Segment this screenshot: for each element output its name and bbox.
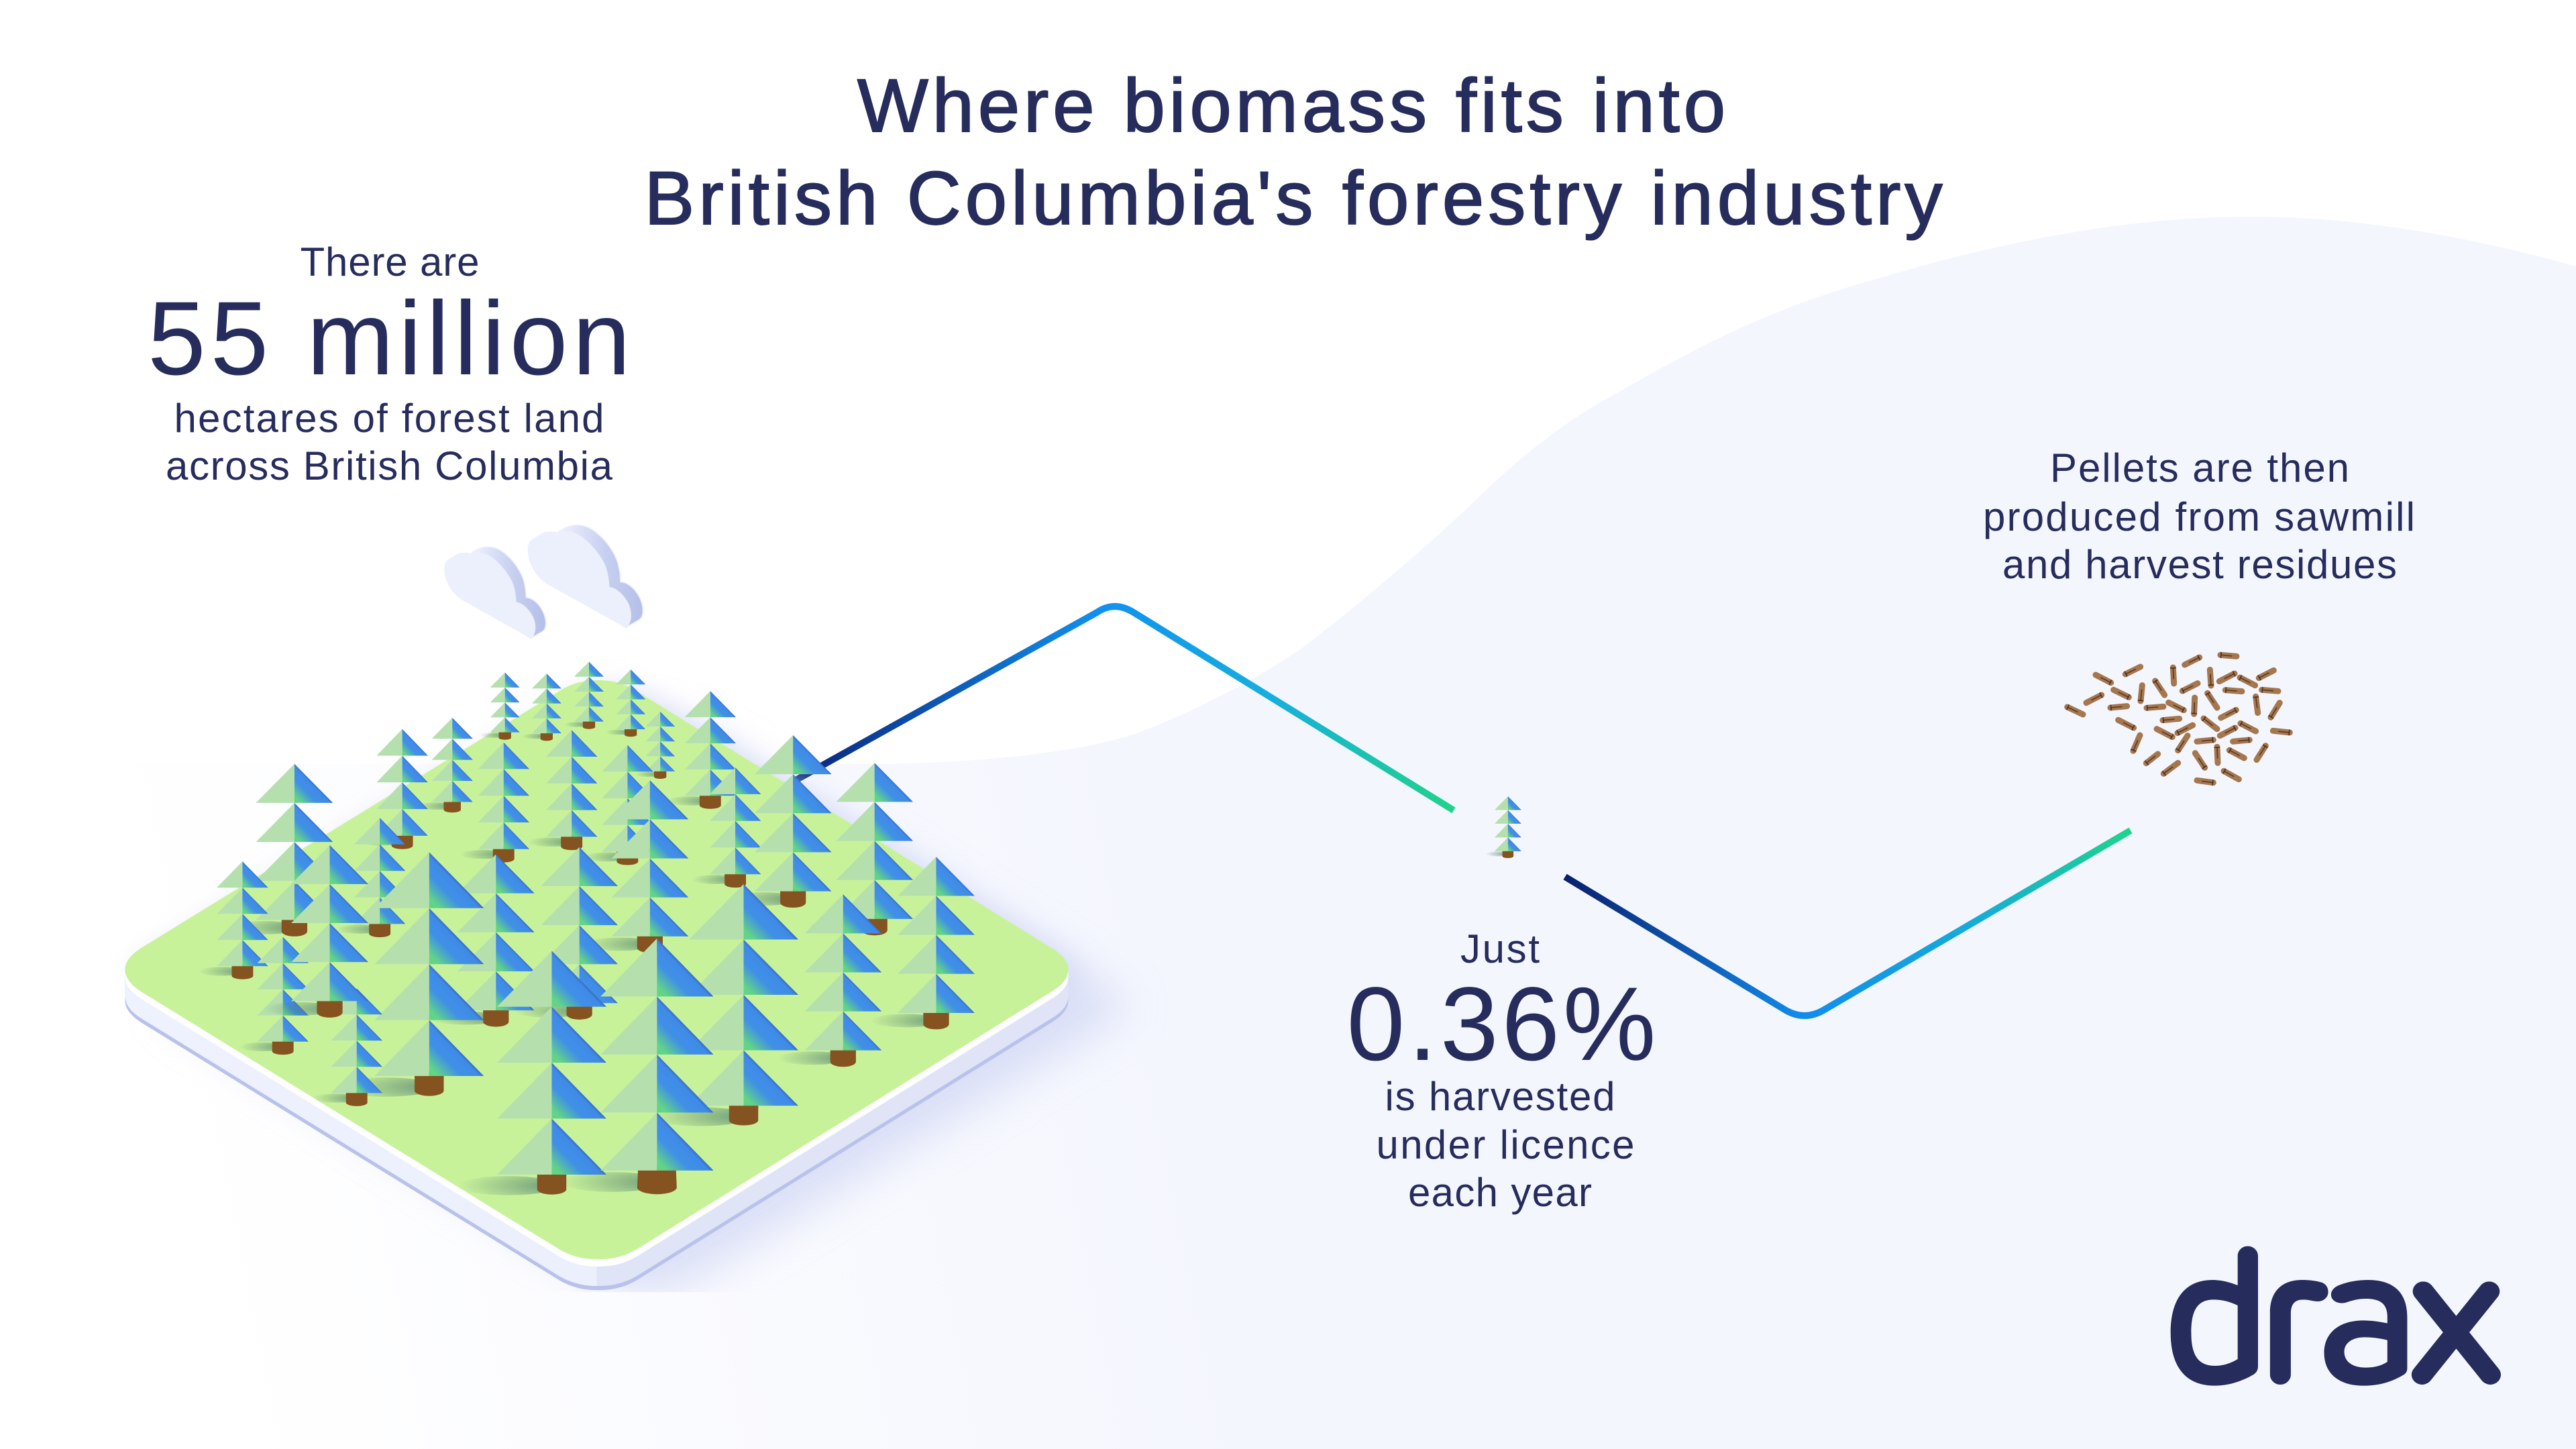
cloud right bbox=[528, 525, 643, 627]
stat: 0.36% harvested: 0.36% bbox=[1347, 966, 1656, 1083]
title: British Columbia's forestry industry bbox=[644, 156, 1943, 240]
logo: drax bbox=[2171, 1246, 2490, 1386]
stat: 0.36% harvested: under licence bbox=[1377, 1122, 1634, 1167]
connector line: forest to small tree bbox=[785, 606, 1454, 810]
pellets caption: Pellets are then bbox=[2050, 445, 2349, 490]
stat: 0.36% harvested: each year bbox=[1408, 1170, 1592, 1215]
icon: wood pellets bbox=[2068, 655, 2290, 783]
cloud left bbox=[444, 547, 546, 638]
platform base bbox=[125, 688, 1069, 1290]
stat: 55 million hectares: across British Columbia bbox=[166, 443, 613, 488]
platform green surface bbox=[125, 680, 1069, 1259]
connector line: small tree to pellets bbox=[1565, 830, 2131, 1016]
platform shadow bbox=[593, 678, 1124, 1292]
stat: 0.36% harvested bbox=[1347, 926, 1656, 1215]
pellets caption: and harvest residues bbox=[2002, 542, 2397, 587]
title bbox=[644, 64, 1943, 240]
isometric forest illustration bbox=[125, 661, 1120, 1295]
title: Where biomass fits into bbox=[857, 64, 1725, 148]
stat: 0.36% harvested: is harvested bbox=[1385, 1074, 1615, 1119]
stat: 55 million hectares bbox=[148, 239, 631, 488]
stat: 55 million hectares: 55 million bbox=[148, 280, 631, 397]
stat: 55 million hectares: hectares of forest land bbox=[174, 396, 604, 441]
pellets caption: produced from sawmill bbox=[1983, 494, 2415, 539]
icon: small tree bbox=[1485, 796, 1521, 858]
trees bbox=[199, 661, 975, 1195]
pellets caption bbox=[1983, 445, 2415, 587]
stat: 55 million hectares: There are bbox=[301, 239, 479, 284]
stat: 0.36% harvested: Just bbox=[1460, 926, 1540, 971]
